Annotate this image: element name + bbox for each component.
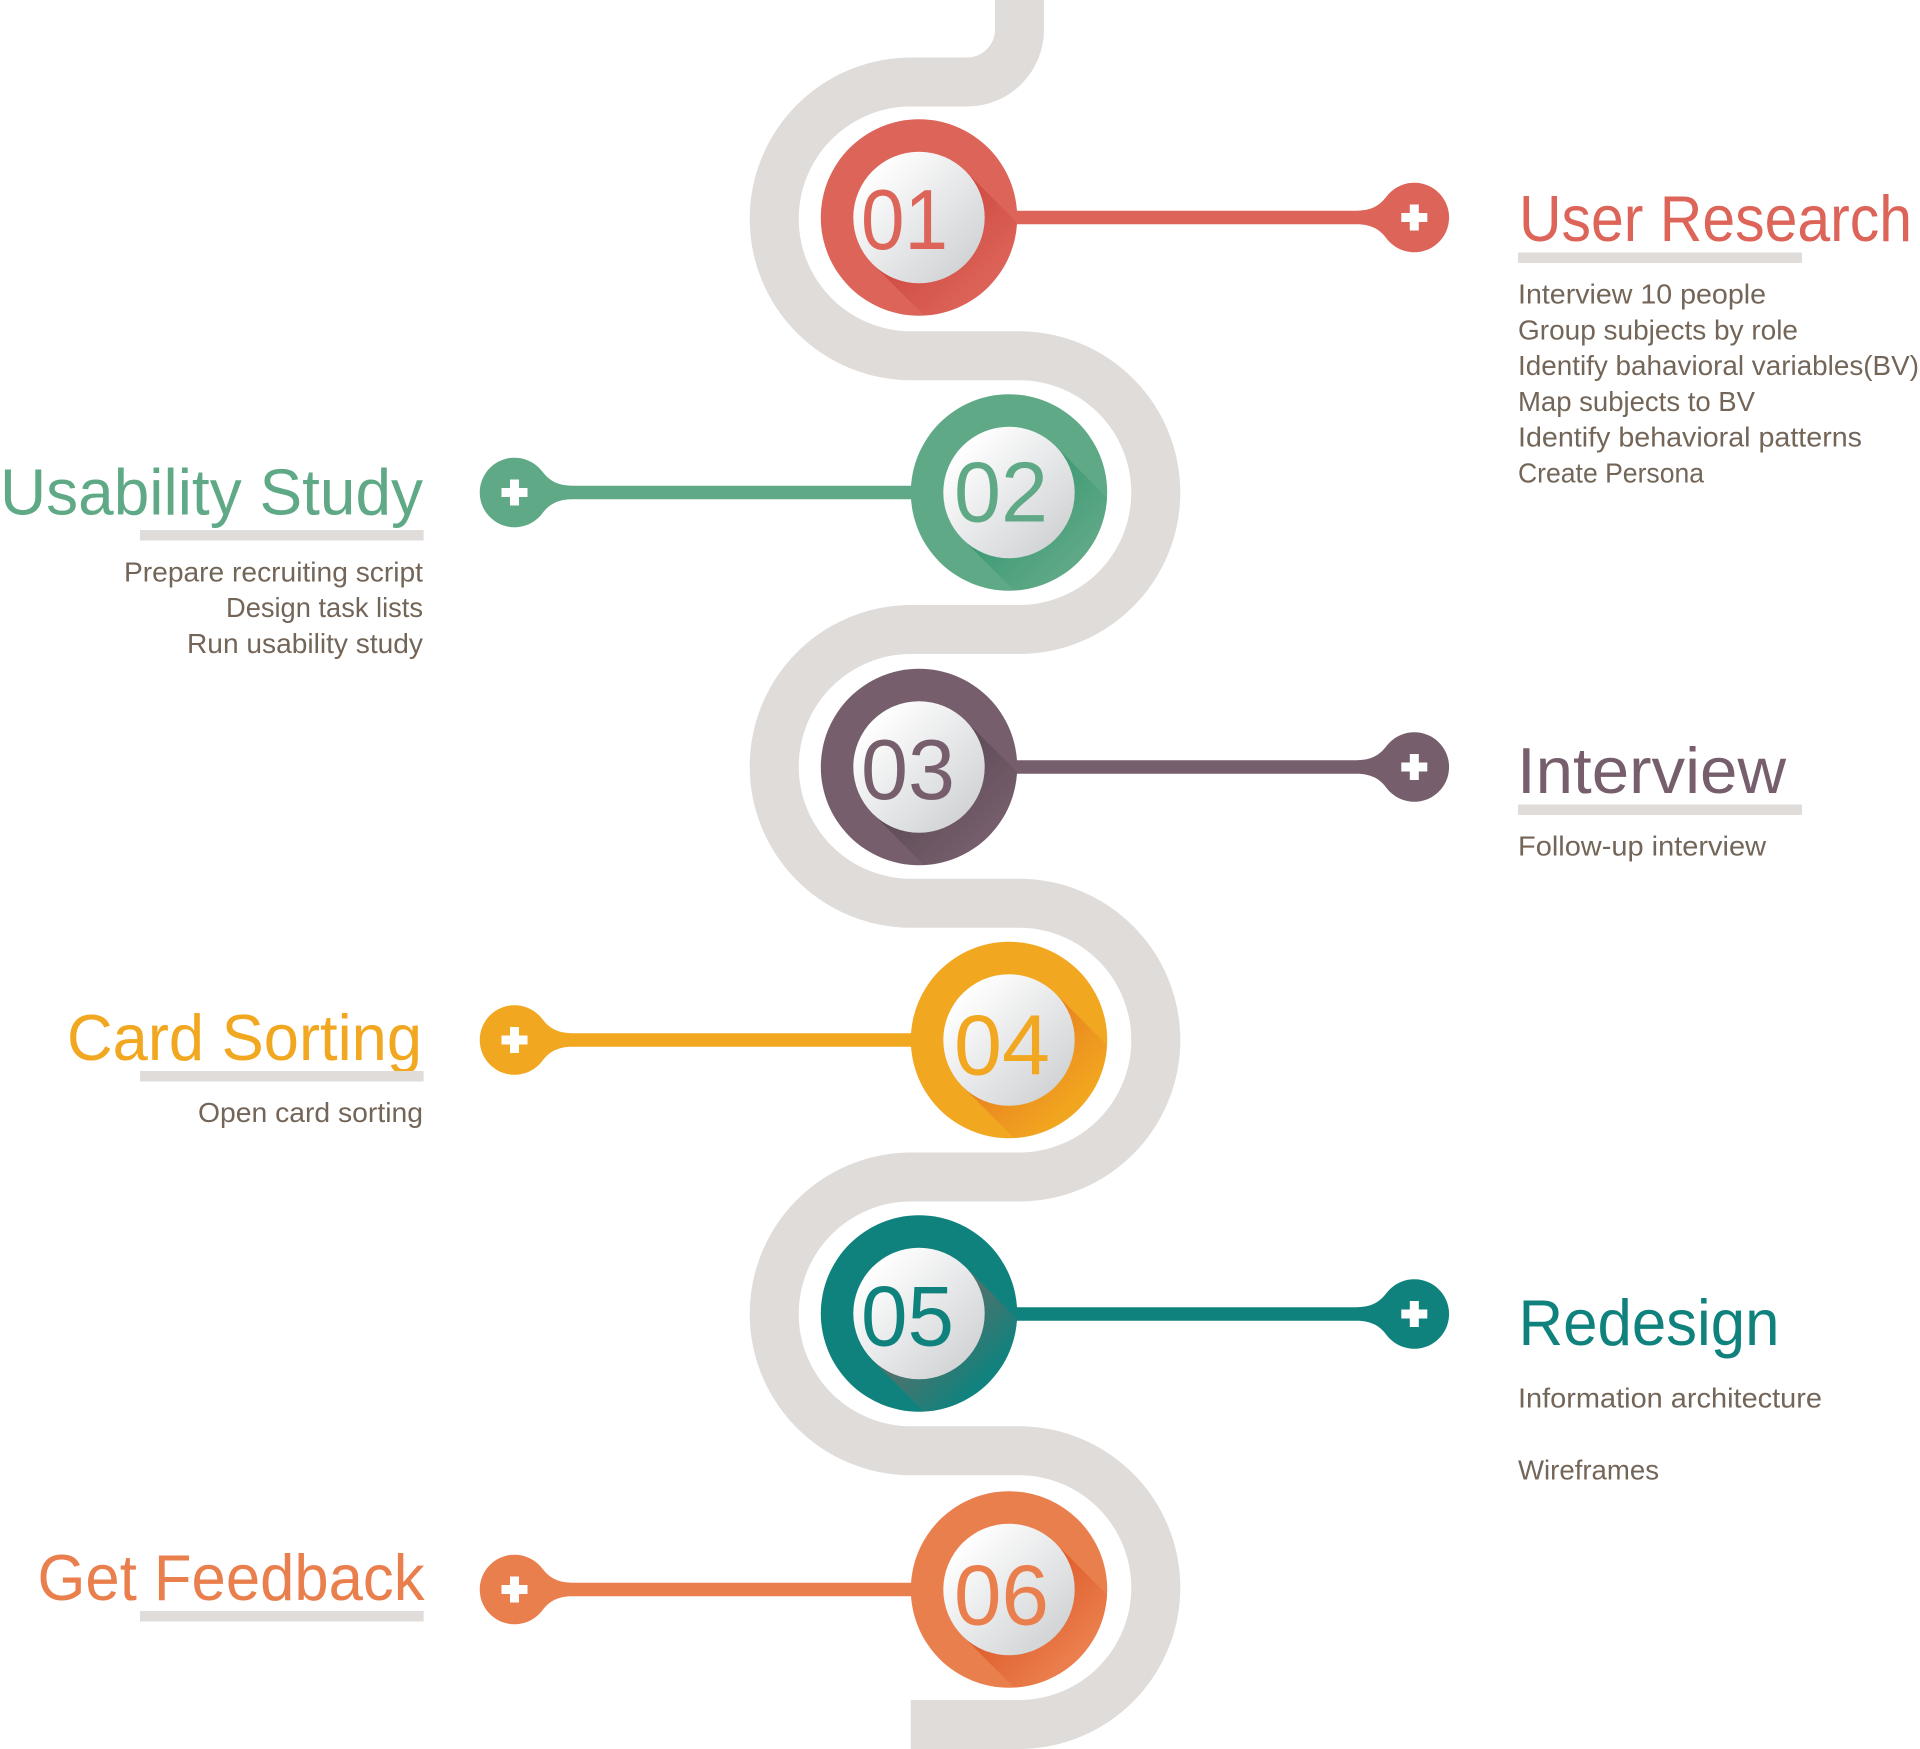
number badge 01: 01 [861,173,948,268]
details list: Run usability study [187,628,423,659]
number badge 05: 05 [861,1270,954,1364]
details list: Create Persona [1518,458,1704,489]
title underline [1518,804,1802,815]
connector and plus pin 05 [1014,1279,1449,1349]
number badge 02: 02 [954,446,1048,540]
number badge 04: 04 [954,998,1050,1094]
title underline [1518,252,1802,263]
number badge 06 [911,1491,1107,1688]
step 01: User Research [821,119,1919,489]
details list [124,556,423,659]
details list: Prepare recruiting script [124,556,423,587]
step 02: Usability Study [0,394,1107,659]
title: Usability Study: Usability Study [0,455,423,528]
connector and plus pin 06 [480,1555,914,1624]
connector and plus pin 03 [1014,732,1449,802]
number badge 05 [821,1215,1017,1412]
step 03: Interview [821,669,1802,865]
details list: Follow-up interview [1518,830,1767,862]
number badge 01 [821,119,1017,316]
details list: Open card sorting [198,1097,423,1128]
details list: Identify behavioral patterns [1518,422,1862,453]
title: Interview: Interview [1517,734,1787,807]
title: Redesign: Redesign [1518,1286,1780,1359]
number badge 04 [911,942,1107,1138]
title underline [140,530,424,540]
step 05: Redesign [821,1215,1822,1486]
details list: Information architecture [1518,1382,1822,1414]
number badge 06: 06 [954,1548,1049,1644]
connector and plus pin 01 [1014,183,1449,252]
number badge 03 [821,669,1017,865]
title underline [140,1611,424,1622]
details list [1518,278,1919,489]
title: Card Sorting: Card Sorting [67,1001,422,1074]
number badge 02 [911,394,1107,591]
title: Get Feedback: Get Feedback [38,1541,425,1614]
details list: Group subjects by role [1518,314,1798,345]
details list: Wireframes [1518,1454,1659,1486]
title underline [140,1071,424,1082]
step 04: Card Sorting [67,942,1107,1138]
number badge 03: 03 [861,723,955,818]
connector and plus pin 04 [480,1005,914,1075]
details list: Identify bahavioral variables(BV) [1518,350,1919,381]
details list [1518,1382,1822,1486]
details list: Map subjects to BV [1518,386,1755,417]
connector and plus pin 02 [480,458,914,527]
details list: Design task lists [226,592,423,623]
winding ribbon path [774,0,1156,1724]
step 06: Get Feedback [38,1491,1107,1688]
details list: Interview 10 people [1518,278,1766,309]
